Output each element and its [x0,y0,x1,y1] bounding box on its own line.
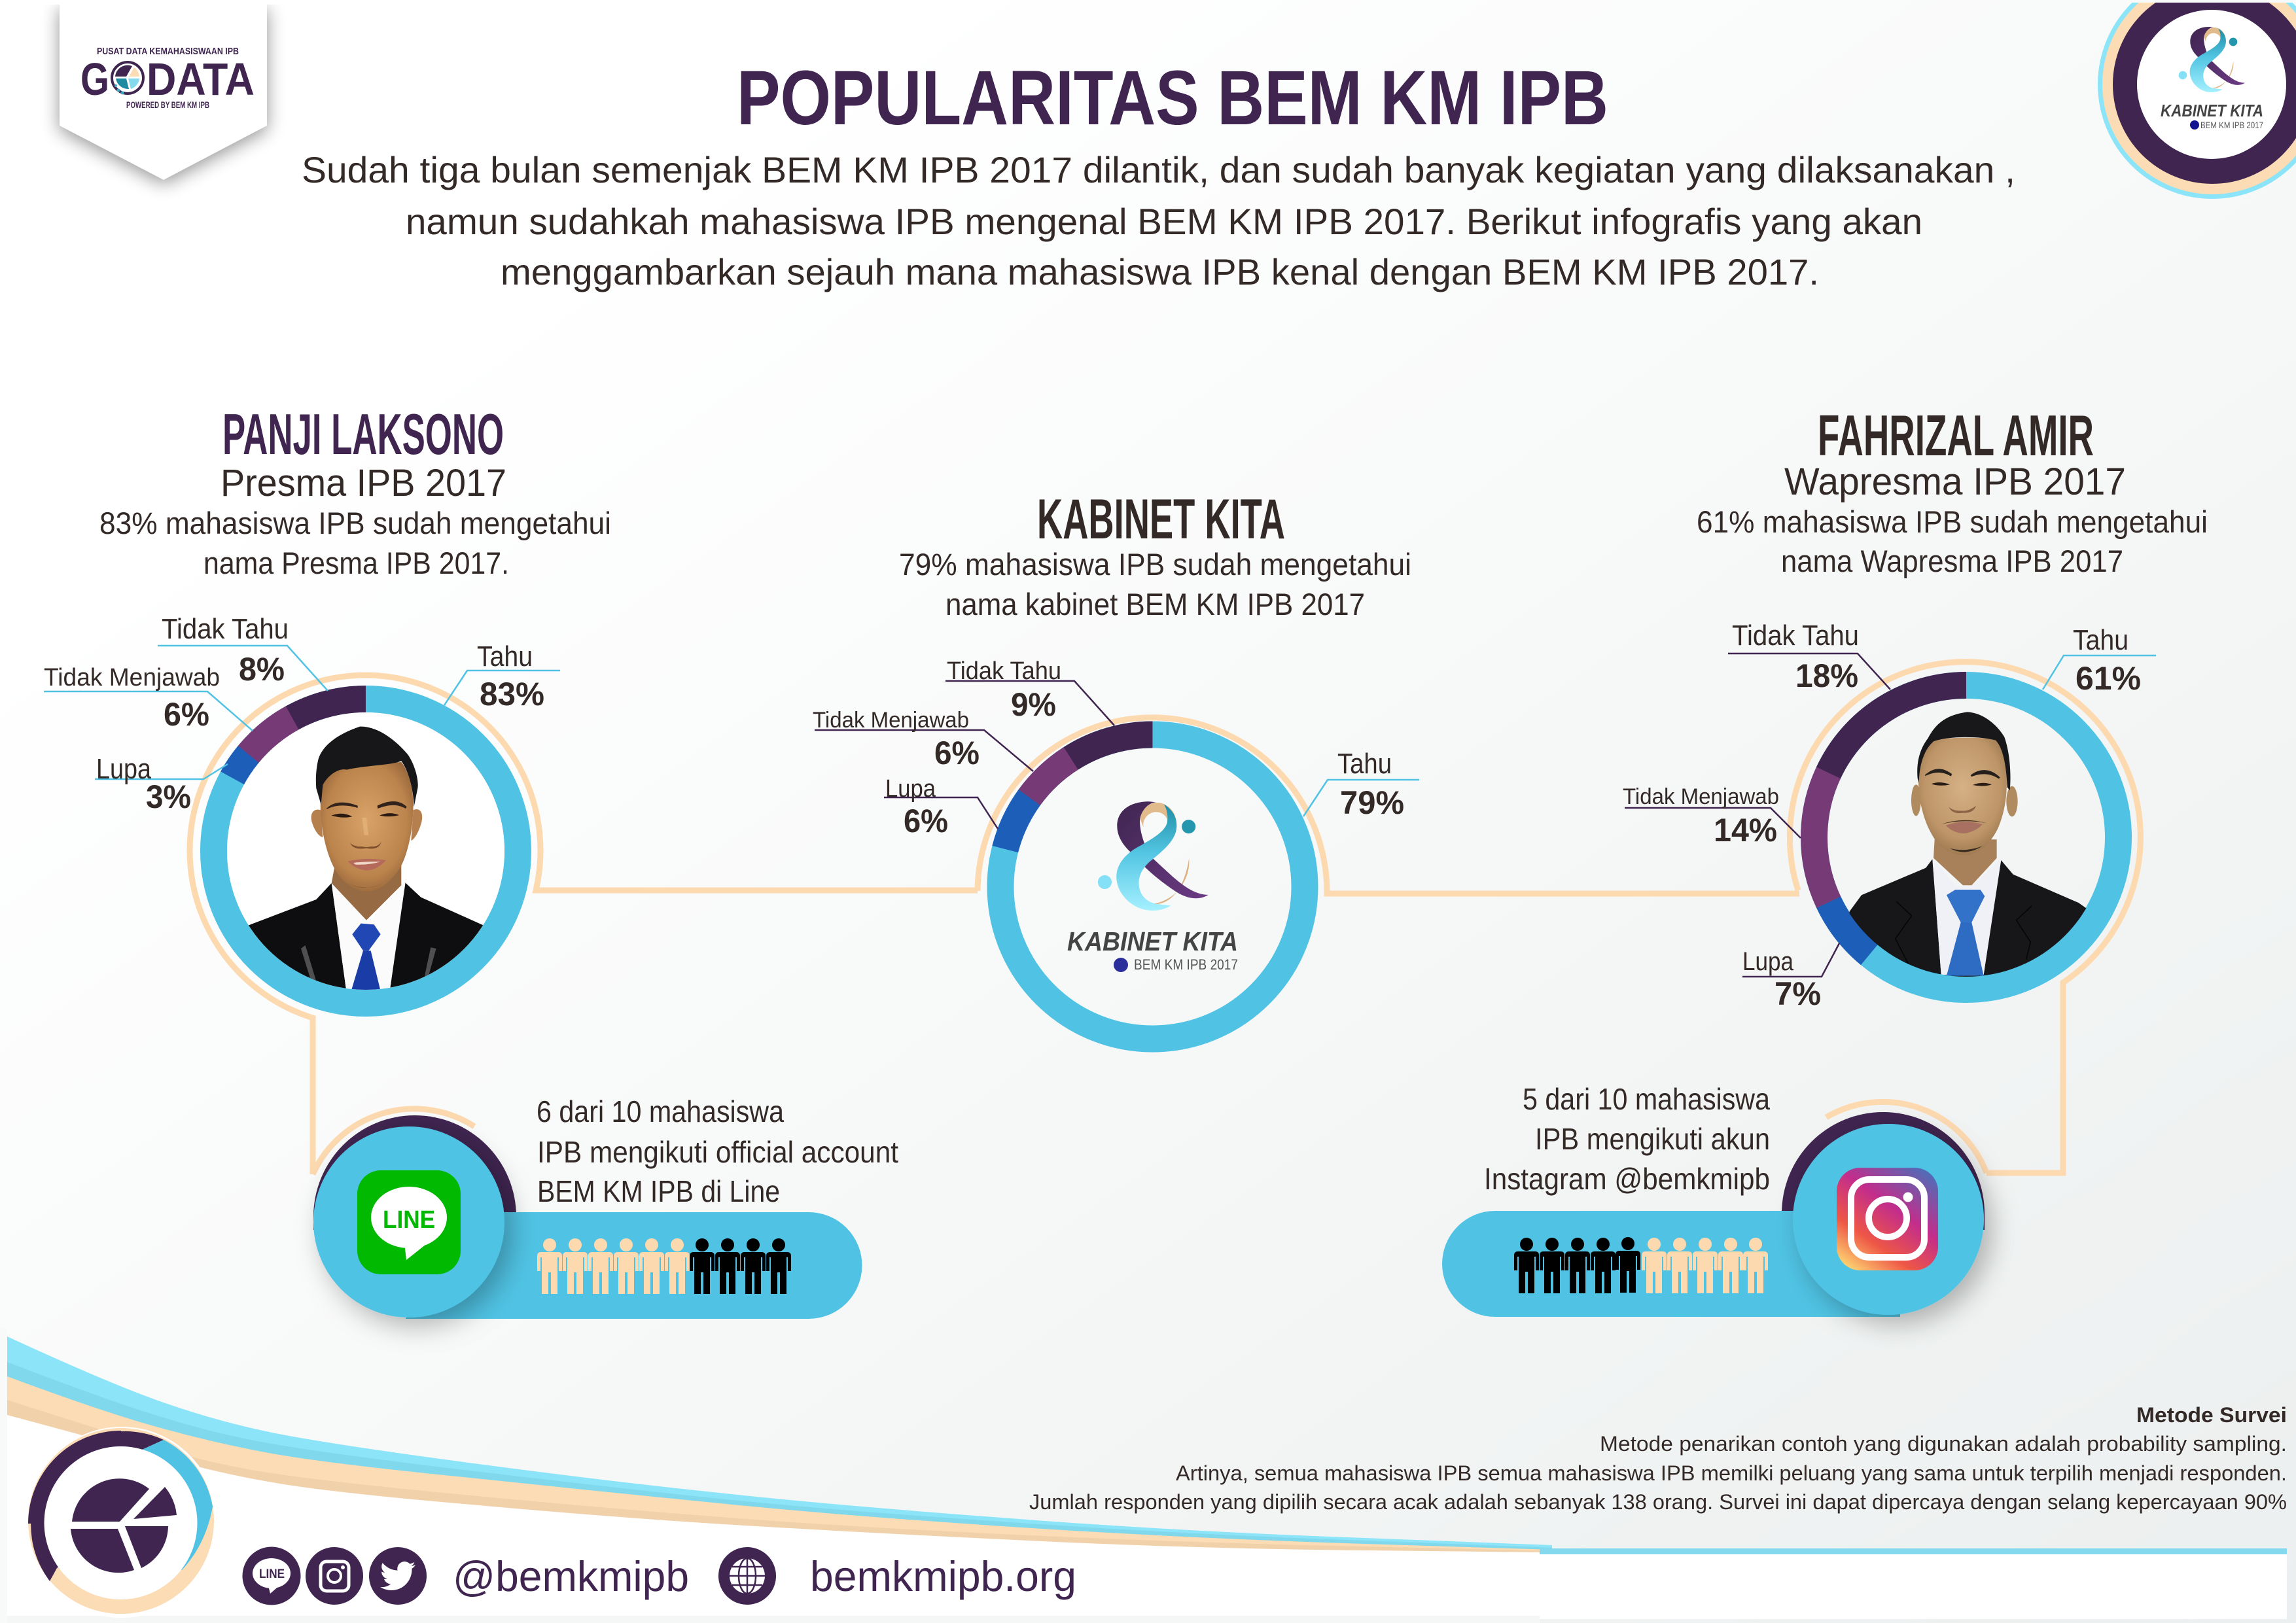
website text: bemkmipb.org [810,1552,1076,1600]
footer swoosh [0,1328,2287,1623]
logo: Kabinet Kita badge top right: BEM KM IPB 2017 [2200,120,2263,130]
label: Tidak Menjawab: Tidak Menjawab [813,708,969,733]
label: Lupa [884,775,998,839]
label: Tidak Menjawab [44,664,253,733]
description: Instagram @bemkmipb [1484,1162,1770,1196]
label: Tahu [1303,748,1419,821]
description: 61% mahasiswa IPB sudah mengetahui [1697,504,2208,539]
icon: LINE: LINE [383,1206,435,1234]
label: Lupa: 3% [146,778,191,815]
people pictogram: 5 of 10 [1514,1237,1768,1293]
label: Tahu: Tahu [477,640,533,672]
label: Lupa: 6% [904,803,948,839]
label: Tidak Menjawab: 6% [164,696,209,733]
description: 5 dari 10 mahasiswa [1523,1082,1770,1116]
description [537,1094,898,1208]
label: Tidak Tahu: 18% [1795,657,1858,694]
icon: LINE social: LINE [259,1567,285,1581]
name heading: FAHRIZAL AMIR [1818,403,2094,468]
description: BEM KM IPB di Line [537,1174,780,1208]
label: Tahu [2043,624,2156,697]
label: Tidak Menjawab [1623,784,1801,848]
label: Tidak Menjawab [813,708,1033,771]
label: Tidak Tahu: 9% [1011,686,1056,723]
label: Tahu: 83% [480,676,544,712]
intro text [302,149,2015,292]
description: IPB mengikuti akun [1535,1122,1770,1156]
description: nama Wapresma IPB 2017 [1781,544,2123,578]
name heading: KABINET KITA [1037,488,1285,551]
label: Tidak Tahu [1728,620,1890,694]
description [899,547,1411,621]
photo: Panji [227,712,504,996]
panel: Instagram statistic [1442,1082,1985,1317]
donut chart [1752,623,2180,1051]
label: Tidak Tahu [945,657,1114,725]
logo: Kabinet Kita badge top right [2098,0,2296,199]
label: Tidak Tahu: 8% [239,651,285,688]
logo: Kabinet Kita badge top right: KABINET KITA [2161,101,2263,120]
icon: LINE social [242,1546,301,1605]
description: nama Presma IPB 2017. [203,546,509,580]
label: Lupa: Lupa [96,753,151,785]
label: Tidak Menjawab: Tidak Menjawab [1623,784,1779,809]
description: nama kabinet BEM KM IPB 2017 [945,587,1365,621]
people pictogram: 6 of 10 [537,1238,791,1294]
label: Tahu [444,640,560,712]
photo: Fahrizal [1845,712,2091,981]
banner: GoData logo: DATA [147,54,255,105]
title: POPULARITAS BEM KM IPB [737,55,1608,141]
label: Tidak Tahu [158,613,328,691]
description: 83% mahasiswa IPB sudah mengetahui [99,506,611,540]
name heading: PANJI LAKSONO [222,402,504,466]
label: Tidak Menjawab: 6% [934,735,980,771]
description: 79% mahasiswa IPB sudah mengetahui [899,547,1411,582]
panel: Fahrizal Amir [1623,403,2208,1051]
label: Lupa [95,753,228,815]
description [99,506,611,580]
label: Lupa: Lupa [885,775,936,803]
label: Tidak Tahu: Tidak Tahu [1732,620,1859,652]
panel: LINE statistic [313,1094,898,1319]
banner: GoData logo: POWERED BY BEM KM IPB [126,100,209,110]
description [1697,504,2208,578]
logo: footer pie badge [26,1427,217,1618]
intro text: namun sudahkah mahasiswa IPB mengenal BEM KM IPB 2017. Berikut infografis yang akan [406,201,1922,242]
panel: Kabinet Kita [813,488,1419,1099]
banner: GoData logo: G [80,54,109,105]
label: Tidak Tahu: Tidak Tahu [947,657,1061,685]
label: Tahu: Tahu [1337,748,1392,780]
label: Tahu: Tahu [2073,624,2128,656]
label: Tahu: 61% [2075,660,2141,697]
icon: Instagram [1837,1168,1938,1270]
role: Wapresma IPB 2017 [1784,461,2126,503]
logo: Kabinet Kita ampersand [1067,801,1238,973]
survey method note: Metode Survei [2136,1403,2287,1427]
icon: globe [718,1547,776,1605]
survey method note: Artinya, semua mahasiswa IPB semua mahasiswa IPB memilki peluang yang sama untuk terpilih menjadi responden. [1176,1461,2287,1485]
survey method note: Metode penarikan contoh yang digunakan adalah probability sampling. [1600,1432,2287,1456]
icon: Instagram social [306,1547,363,1605]
label: Tidak Tahu: Tidak Tahu [162,613,289,645]
handle text: @bemkmipb [453,1552,689,1600]
label: Lupa: Lupa [1742,947,1794,976]
intro text: Sudah tiga bulan semenjak BEM KM IPB 2017 dilantik, dan sudah banyak kegiatan yang dilaksanakan , [302,149,2015,190]
intro text: menggambarkan sejauh mana mahasiswa IPB kenal dengan BEM KM IPB 2017. [501,251,1819,292]
label: Lupa: 7% [1775,975,1821,1012]
banner: GoData logo: PUSAT DATA KEMAHASISWAAN IPB [97,46,239,57]
banner: GoData logo [60,5,267,184]
label: Tidak Menjawab: Tidak Menjawab [44,664,220,691]
description [1484,1082,1770,1196]
panel: Panji Laksono [44,402,611,1065]
description: 6 dari 10 mahasiswa [537,1094,784,1128]
label: Tidak Menjawab: 14% [1714,812,1777,848]
survey method note [1029,1403,2287,1514]
logo: Kabinet Kita ampersand: KABINET KITA [1067,926,1238,956]
survey method note: Jumlah responden yang dipilih secara acak adalah sebanyak 138 orang. Survei ini dapat dipercaya dengan selang kepercayaan 90% [1029,1490,2287,1514]
label: Tahu: 79% [1340,784,1404,821]
connector lines and arcs [190,662,2140,1174]
donut chart [152,637,580,1065]
label: Lupa [1742,943,1839,1012]
icon: Twitter social [369,1547,427,1605]
icon: LINE [357,1170,461,1274]
logo: Kabinet Kita ampersand: BEM KM IPB 2017 [1134,956,1238,973]
role: Presma IPB 2017 [221,462,506,504]
donut chart [940,674,1365,1099]
description: IPB mengikuti official account [537,1135,898,1169]
